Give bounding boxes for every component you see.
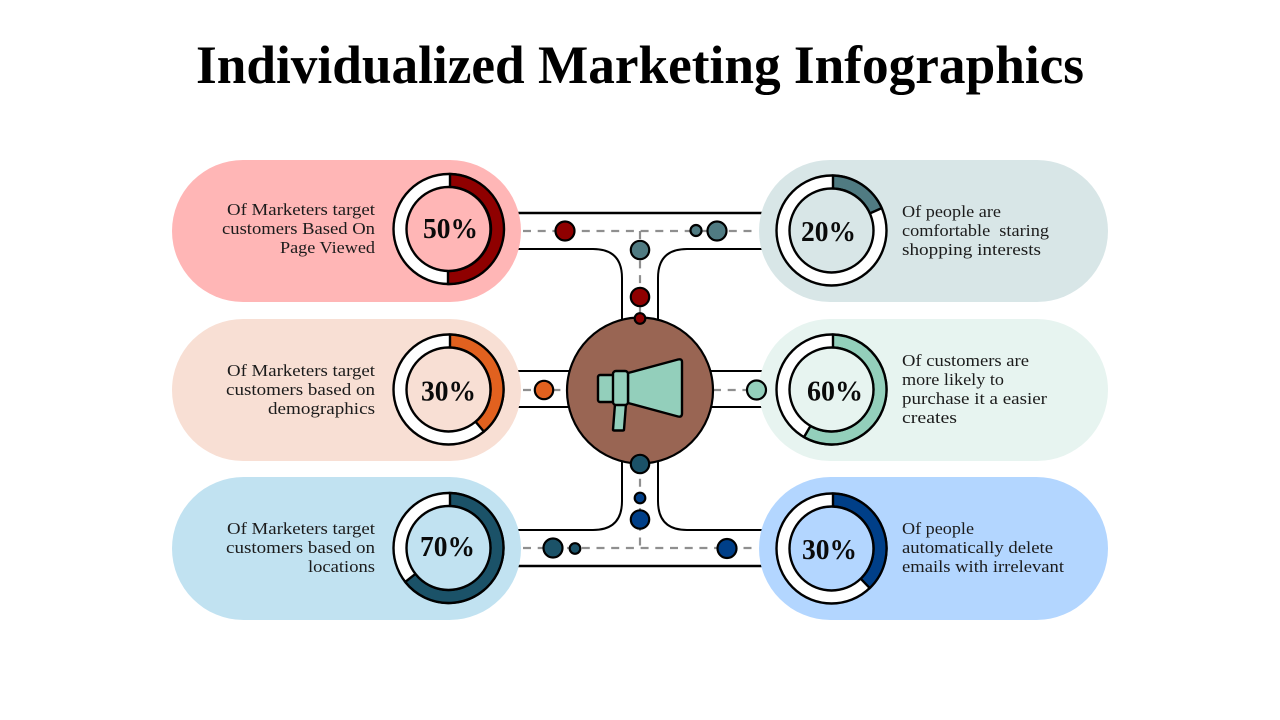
donut: 70%: 70% (420, 532, 475, 563)
description: Of Marketers target (227, 200, 375, 219)
description: automatically delete (902, 538, 1053, 557)
donut: 50% (394, 174, 504, 284)
description: locations (308, 557, 375, 576)
panel: marketers locations (172, 477, 521, 620)
donut: 70% (394, 493, 504, 603)
center circle with megaphone (567, 318, 713, 464)
description: creates (902, 408, 957, 427)
description: emails with irrelevant (902, 557, 1064, 576)
donut: 30% (394, 334, 504, 444)
donut: 50%: 50% (423, 214, 478, 245)
description: more likely to (902, 370, 1004, 389)
panel: marketers page viewed (172, 160, 521, 302)
description: comfortable staring (902, 221, 1050, 240)
description: demographics (268, 399, 375, 418)
panel: people delete emails (759, 477, 1108, 620)
title: Individualized Marketing Infographics (196, 35, 1084, 95)
description (902, 519, 1064, 576)
donut: 60% (776, 334, 887, 444)
flow dots (535, 222, 766, 558)
panel: people shopping interests (759, 160, 1108, 302)
donut: 20% (776, 176, 886, 286)
description: Of customers are (902, 351, 1029, 370)
description: Page Viewed (280, 238, 376, 257)
donut: 20%: 20% (801, 217, 856, 248)
description: customers based on (226, 538, 376, 557)
description (226, 519, 376, 576)
donut: 60%: 60% (807, 376, 863, 408)
description: Of people (902, 519, 974, 538)
description: shopping interests (902, 240, 1041, 259)
icon: megaphone (598, 359, 682, 430)
description: purchase it a easier (902, 389, 1047, 408)
description: Of Marketers target (227, 519, 375, 538)
description: customers Based On (222, 219, 376, 238)
panel: customers purchase (759, 319, 1108, 461)
donut: 30% (776, 494, 887, 604)
panel: marketers demographics (172, 319, 521, 461)
description (902, 351, 1047, 427)
description (902, 202, 1050, 259)
description (222, 200, 376, 257)
description: Of people are (902, 202, 1001, 221)
donut: 30%: 30% (421, 376, 476, 408)
description: Of Marketers target (227, 361, 375, 380)
description: customers based on (226, 380, 376, 399)
description (226, 361, 376, 418)
connector network (515, 213, 765, 566)
donut: 30%: 30% (802, 535, 857, 566)
